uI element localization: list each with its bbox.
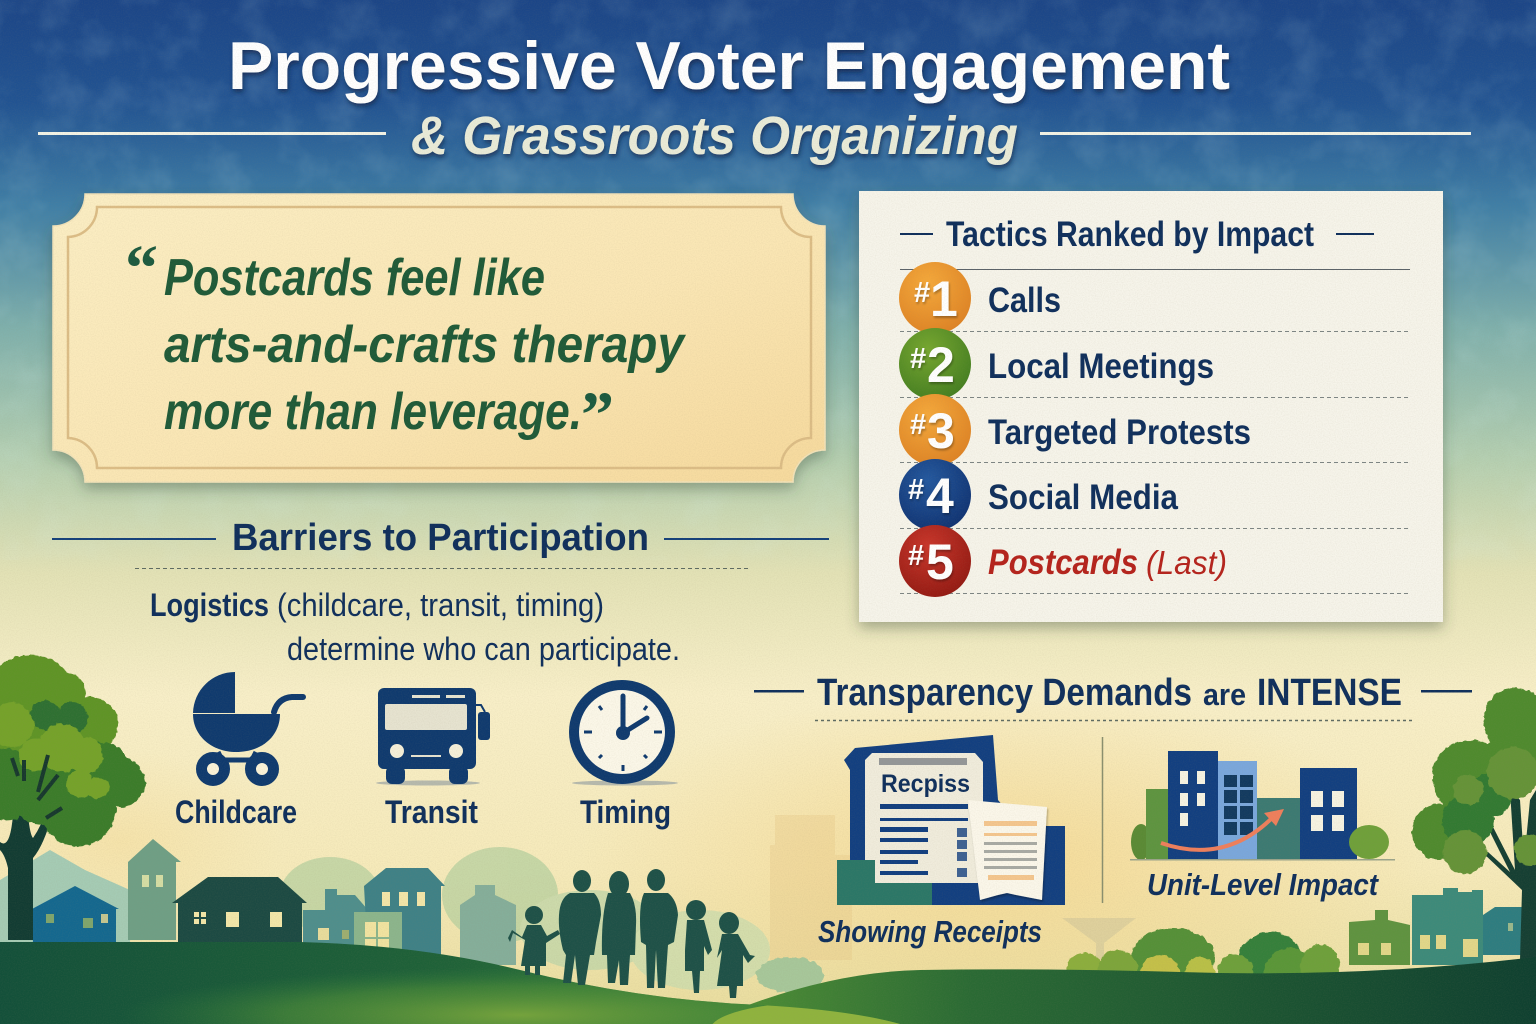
rank 2: local meetings: Local Meetings — [988, 347, 1214, 386]
quote plaque — [53, 194, 825, 482]
subtitle with rules: & Grassroots Organizing — [411, 106, 1018, 166]
rank 1: calls: Calls — [988, 281, 1061, 320]
heading: transparency demands: INTENSE — [1257, 672, 1402, 714]
icon: stroller — [193, 672, 303, 780]
family silhouettes — [508, 869, 755, 998]
adult one — [559, 870, 601, 985]
rank 1: calls: 1 — [930, 271, 958, 327]
quote text: Postcards feel like — [164, 249, 545, 307]
scenery: left background hills and houses — [0, 655, 1136, 990]
rank 3: targeted protests: 3 — [927, 403, 955, 459]
quote text: ” — [581, 379, 614, 452]
panel: tactics ranked by impact — [859, 191, 1443, 622]
rank 4: social media: Social Media — [988, 478, 1178, 517]
adult three — [640, 869, 678, 988]
child right — [685, 900, 712, 993]
right houses — [1349, 888, 1525, 965]
ground hills — [0, 942, 1536, 1024]
child far right — [717, 912, 755, 998]
quote text: “ — [125, 232, 158, 305]
heading: transparency demands: are — [1203, 677, 1246, 712]
blue house — [32, 886, 119, 944]
rank 2: local meetings — [899, 328, 1214, 400]
rank 3: targeted protests: Targeted Protests — [988, 413, 1251, 452]
rank 2: local meetings: # — [910, 343, 926, 375]
quote text: more than leverage. — [164, 383, 582, 441]
subtitle with rules — [38, 106, 1471, 166]
icon: clock — [572, 685, 678, 786]
icon: buildings with impact arrow — [1130, 751, 1395, 860]
left tree — [0, 655, 145, 940]
icon: bus — [376, 688, 490, 786]
faint distant funnel shape — [1062, 918, 1136, 960]
rank 5: postcards (last): # — [908, 540, 924, 572]
rank 4: social media — [899, 459, 1178, 531]
icon: receipts and folder — [837, 735, 1065, 905]
label: transit: Transit — [385, 794, 478, 830]
rank 5: postcards (last) — [899, 525, 1227, 597]
rank 4: social media: # — [908, 474, 924, 506]
heading: transparency demands: Transparency Demands — [817, 672, 1192, 714]
heading: barriers to participation: Barriers to Participation — [232, 517, 649, 559]
panel heading: Tactics Ranked by Impact — [946, 215, 1314, 254]
child left — [508, 906, 560, 975]
rank 5: postcards (last): 5 — [926, 534, 954, 590]
rank 3: targeted protests — [899, 394, 1251, 466]
scenery: right side shrubs, houses and tree — [756, 688, 1536, 996]
rank 3: targeted protests: # — [910, 409, 926, 441]
teal houses — [303, 868, 516, 965]
quote text — [125, 232, 687, 452]
quote text: arts-and-crafts therapy — [164, 316, 687, 374]
label: timing: Timing — [580, 794, 671, 830]
barriers text block — [150, 587, 680, 667]
right tree — [1412, 688, 1536, 960]
title: Progressive Voter Engagement — [228, 28, 1230, 104]
rank 2: local meetings: 2 — [927, 337, 955, 393]
barriers text block: (childcare, transit, timing) — [277, 587, 604, 623]
barriers text block: Logistics — [150, 587, 269, 623]
rank 5: postcards (last): (Last) — [1146, 544, 1227, 581]
dark house — [172, 877, 307, 948]
distant pale building — [770, 815, 852, 960]
label: childcare: Childcare — [175, 794, 297, 830]
rank 1: calls — [899, 262, 1061, 334]
label: unit-level impact: Unit-Level Impact — [1147, 867, 1379, 902]
right shrubs — [756, 928, 1340, 996]
distant tree hills — [0, 847, 770, 990]
rank 5: postcards (last): Postcards — [988, 543, 1138, 582]
rank 4: social media: 4 — [926, 468, 954, 524]
icon: receipts and folder: Recpiss — [881, 770, 970, 798]
heading: transparency demands — [754, 672, 1472, 714]
adult two — [602, 871, 636, 985]
label: showing receipts: Showing Receipts — [818, 914, 1042, 949]
rank 1: calls: # — [914, 277, 930, 309]
barriers text block: determine who can participate. — [287, 631, 680, 667]
tower house — [128, 839, 181, 940]
